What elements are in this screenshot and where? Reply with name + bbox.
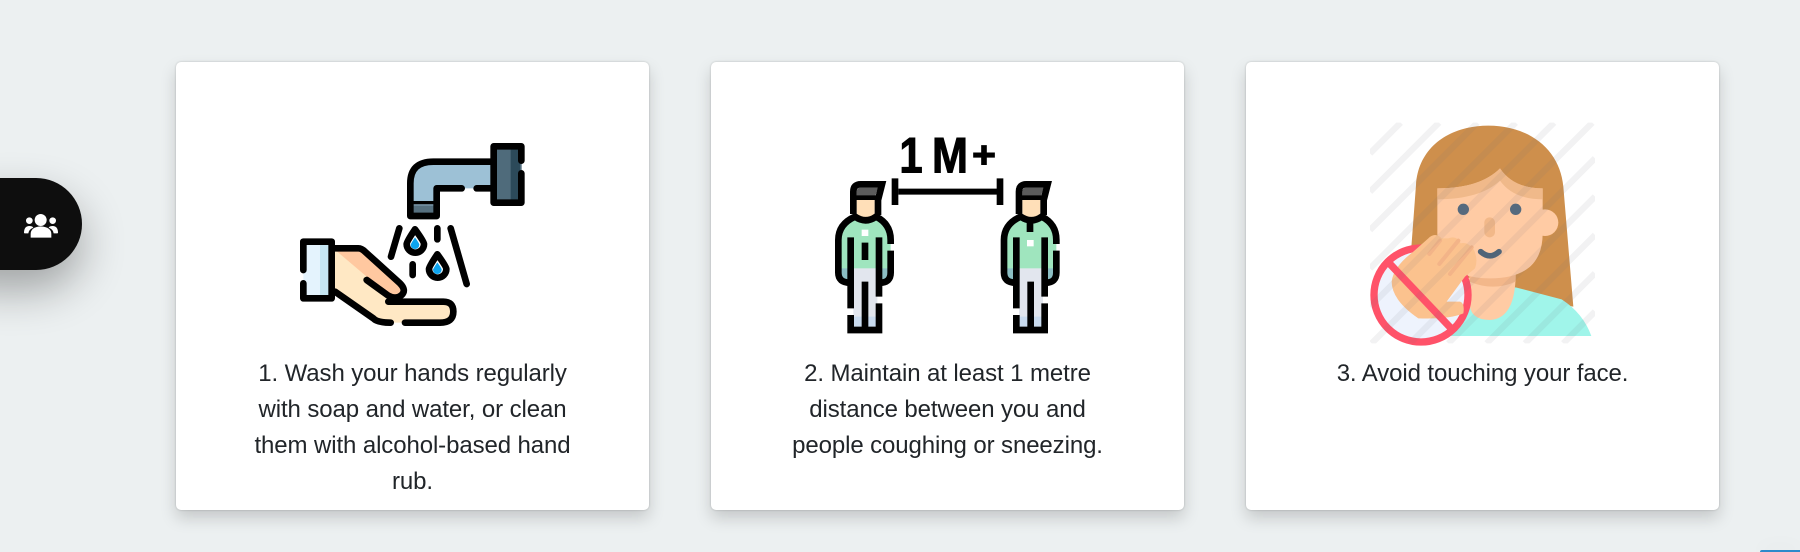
text: step 2 [792, 360, 1103, 459]
face [1437, 168, 1543, 278]
label: 1 M+: + [972, 134, 996, 175]
text: step 1: 1. Wash your hands regularly [258, 360, 567, 387]
label: 1 M+ [899, 128, 996, 184]
person left [838, 184, 891, 333]
water drops and streaks [391, 228, 467, 284]
neck [1469, 273, 1516, 320]
text: step 2: distance between you and [809, 396, 1086, 423]
floating dock tab with users icon [0, 178, 82, 270]
prohibition slash [1389, 263, 1453, 330]
hand [1392, 235, 1476, 318]
text: step 2: people coughing or sneezing. [792, 432, 1103, 459]
icon: hand under running tap [300, 143, 525, 326]
text: step 1: rub. [392, 468, 433, 495]
hand and cuff [303, 242, 453, 323]
panel: keep distance [711, 62, 1184, 510]
corner button edge, bottom right [1760, 550, 1800, 552]
text: step 1 [254, 360, 571, 495]
icon: users group [24, 214, 58, 238]
text: step 3: 3. Avoid touching your face. [1337, 360, 1628, 387]
text: step 1: them with alcohol-based hand [254, 432, 571, 459]
prohibition ring [1374, 248, 1468, 342]
person right [1004, 184, 1056, 333]
text: step 1: with soap and water, or clean [259, 396, 566, 423]
text: step 2: 2. Maintain at least 1 metre [804, 360, 1091, 387]
tap [410, 146, 522, 216]
hair [1411, 126, 1573, 307]
distance bar [895, 178, 1000, 205]
shirt [1450, 287, 1591, 336]
icon: two people one metre apart [835, 128, 1060, 334]
eyes, nose and mouth [1458, 204, 1521, 256]
panel: avoid touching face [1246, 62, 1719, 510]
icon: woman touching face with prohibition sign [1370, 122, 1595, 346]
panel: wash hands [176, 62, 649, 510]
label: 1 M+: M [932, 128, 968, 184]
ear [1532, 209, 1558, 236]
label: 1 M+: 1 [899, 128, 923, 184]
diagonal watermark stripes [1370, 123, 1595, 343]
